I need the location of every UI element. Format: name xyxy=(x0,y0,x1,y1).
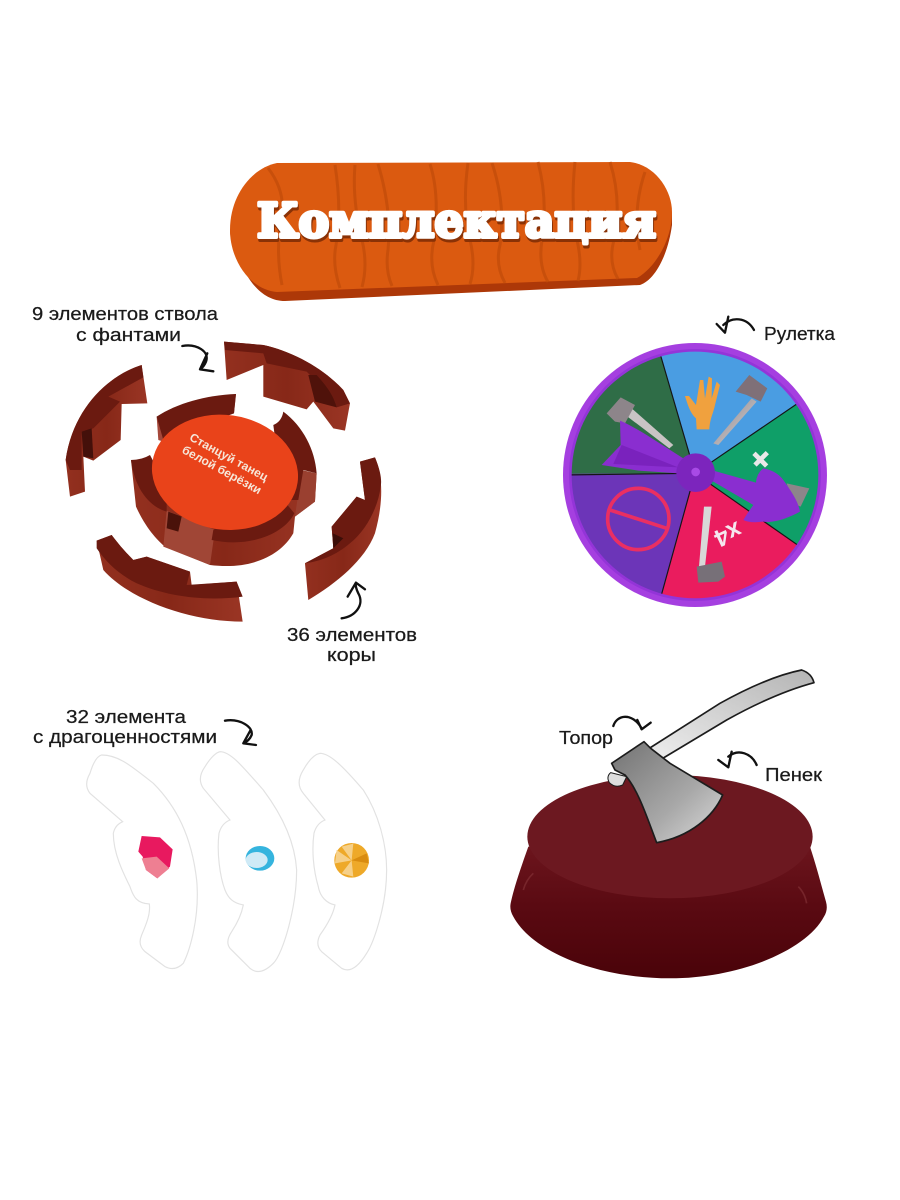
card: ruby xyxy=(87,755,197,969)
arrow: to gem elements xyxy=(225,720,256,745)
title text: Комплектация xyxy=(257,194,656,249)
piece: centre with forfeit xyxy=(131,394,317,566)
roulette wheel xyxy=(563,343,827,607)
gem: amber xyxy=(334,843,369,878)
axe xyxy=(608,670,814,843)
label: bark elements: 36 элементов xyxy=(287,624,417,645)
label: trunk elements: 9 элементов ствола xyxy=(32,303,219,324)
axe blade xyxy=(612,742,723,843)
sector: dark green xyxy=(572,356,689,474)
icon: hand xyxy=(685,377,720,429)
arrow: to stump xyxy=(718,752,757,767)
label: with gems: с драгоценностями xyxy=(33,726,217,747)
label: roulette: Рулетка xyxy=(764,323,836,344)
gem: topaz xyxy=(246,846,274,871)
forfeit text: белой берёзки xyxy=(180,443,264,497)
spinner hub xyxy=(676,453,715,492)
stump body xyxy=(510,847,827,978)
stump xyxy=(510,670,827,978)
title banner xyxy=(230,162,672,301)
card: amber xyxy=(299,753,387,970)
icon: axe upper left xyxy=(607,397,673,448)
label: multiplier: x4 xyxy=(709,516,746,552)
sector: pink xyxy=(662,485,797,598)
label: bark: коры xyxy=(327,644,376,665)
icon: forbidden sign xyxy=(608,488,669,550)
piece: top right xyxy=(224,342,350,431)
label: with forfeits: с фантами xyxy=(76,324,181,345)
forfeit disc xyxy=(144,405,306,539)
gem: ruby xyxy=(138,836,173,878)
icon: axe lower xyxy=(697,507,725,583)
gem cards xyxy=(87,752,387,972)
sector: blue xyxy=(661,352,796,462)
piece: left xyxy=(66,365,147,497)
icon: axe right xyxy=(787,483,809,507)
stump top xyxy=(527,775,813,898)
sector: green xyxy=(711,404,818,544)
arrow: to trunk elements xyxy=(182,345,213,371)
axe butt xyxy=(608,773,627,786)
arrow: to axe xyxy=(613,717,651,729)
piece: right xyxy=(305,457,381,600)
label: axe: Топор xyxy=(559,727,613,748)
trunk pieces xyxy=(66,342,381,622)
label: gem elements: 32 элемента xyxy=(66,706,187,727)
spinner arrow xyxy=(602,421,800,522)
forfeit text: Станцуй танец xyxy=(187,430,271,484)
card: topaz xyxy=(200,752,297,972)
arrow: to roulette xyxy=(717,317,754,333)
sector: purple xyxy=(572,474,690,594)
label: stump: Пенек xyxy=(765,764,823,785)
icon: cross upper right xyxy=(754,453,767,466)
piece: bottom left xyxy=(97,535,243,622)
axe handle xyxy=(647,670,814,760)
icon: axe upper right xyxy=(713,375,767,445)
arrow: to bark elements xyxy=(342,583,365,618)
